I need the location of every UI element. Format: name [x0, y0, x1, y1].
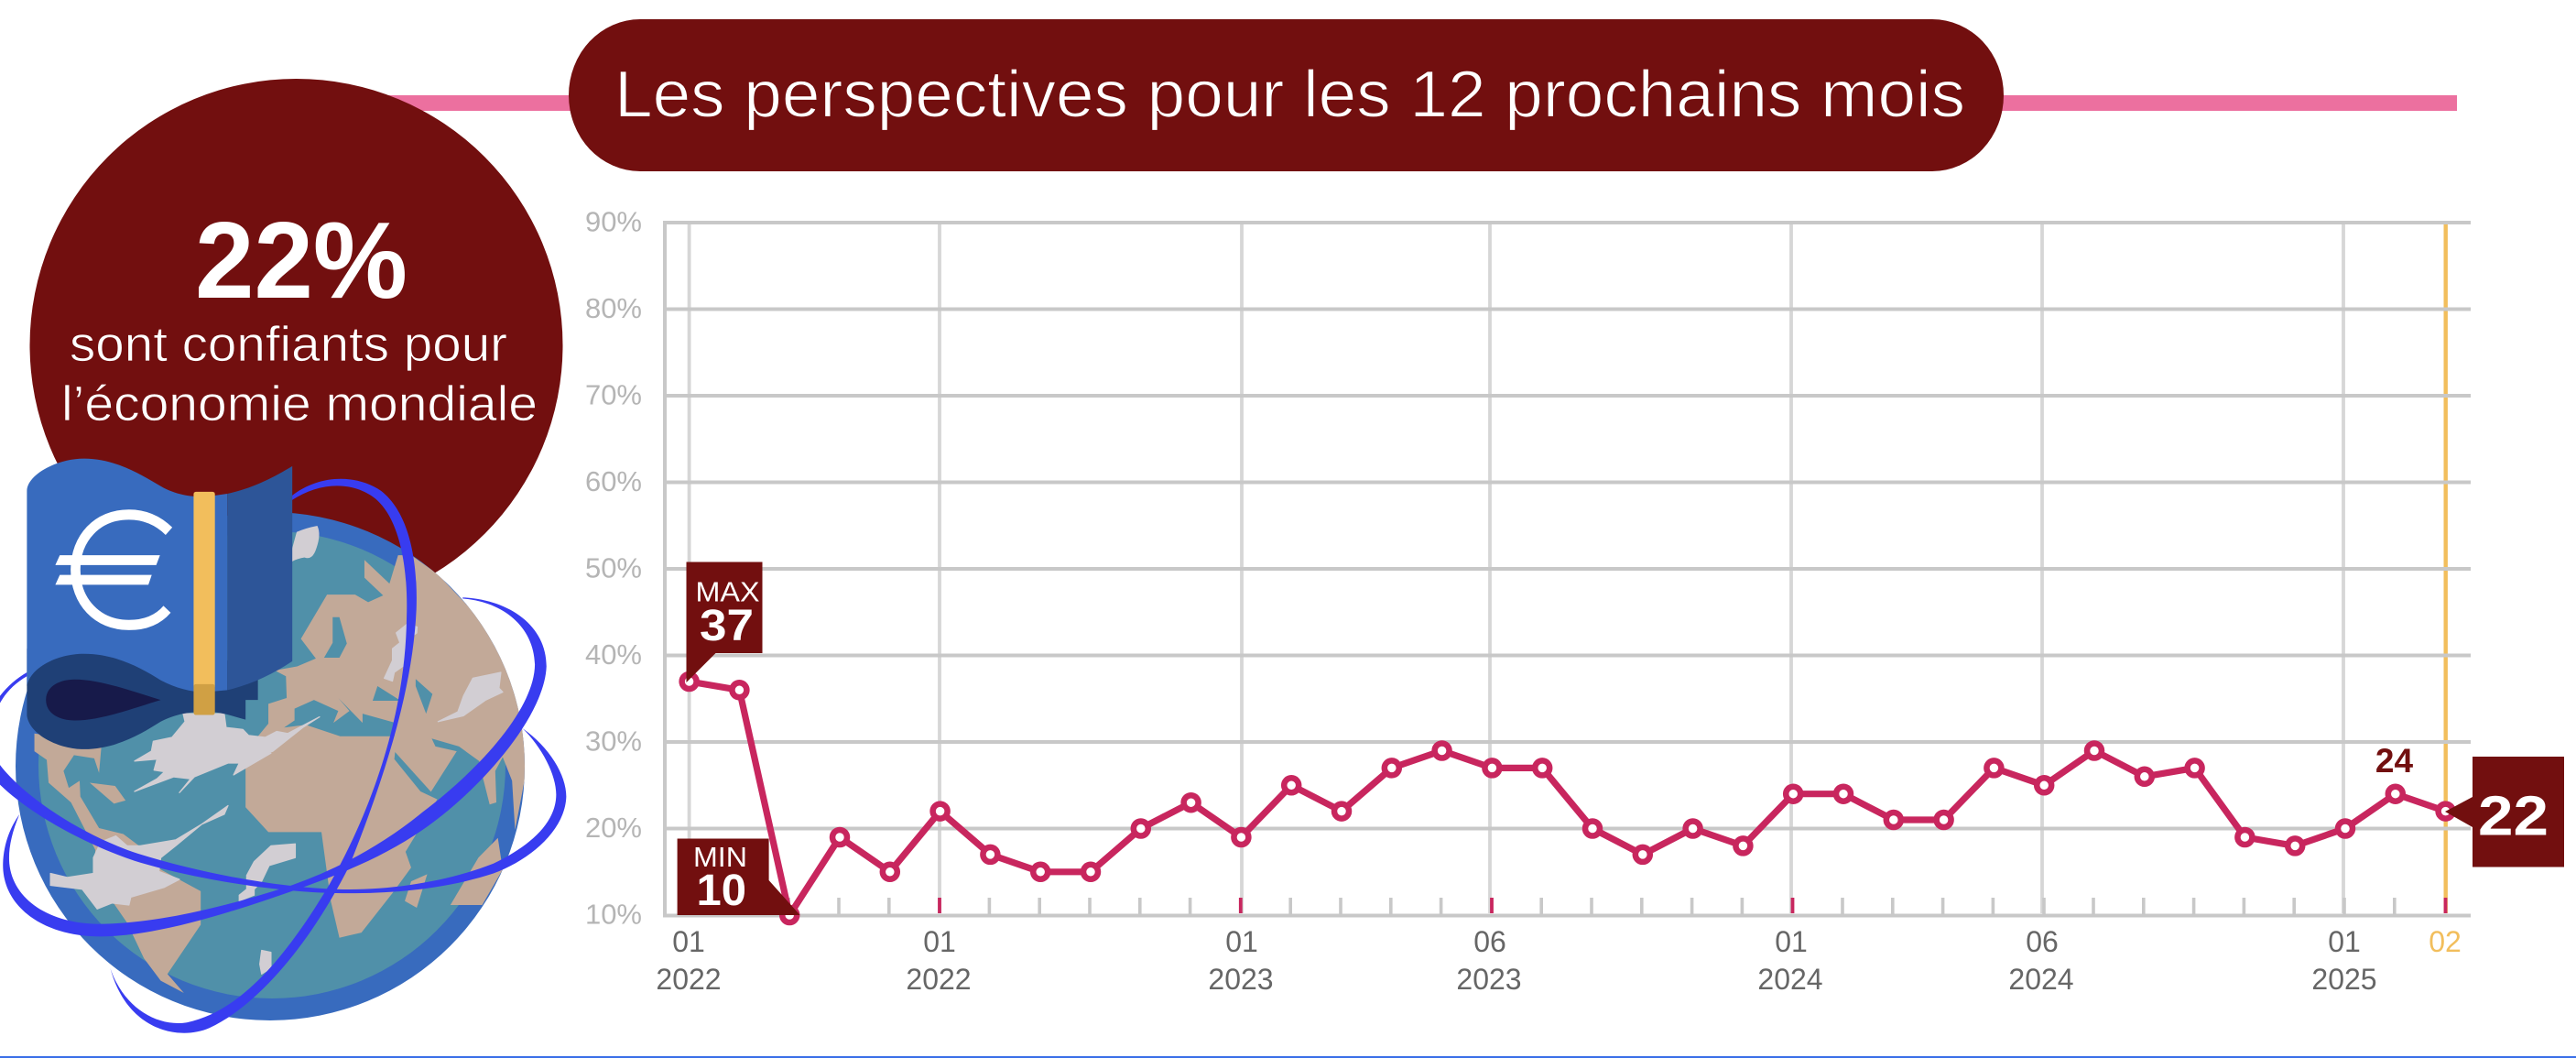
x axis month labels: 06 — [1473, 925, 1506, 958]
callout: latest value — [2445, 757, 2564, 867]
line chart — [585, 205, 2564, 996]
orbit rings — [0, 479, 566, 1033]
x axis month labels: 01 — [1775, 925, 1808, 958]
x axis month labels: 01 — [1225, 925, 1258, 958]
highlighted ticks — [940, 898, 2445, 913]
callout: minimum: MIN — [693, 841, 747, 873]
current month marker line — [2443, 223, 2448, 913]
euro symbol — [55, 515, 168, 625]
vertical grid lines — [690, 223, 2343, 913]
big number 22%: 22% — [195, 200, 408, 322]
flag — [27, 459, 292, 749]
x axis year labels: 2022 — [906, 963, 972, 996]
callout: maximum: 37 — [700, 602, 754, 650]
inland seas — [284, 617, 432, 736]
callout: maximum — [687, 562, 762, 682]
ribbon fold — [46, 680, 161, 721]
icon: globe with euro flag — [0, 459, 566, 1033]
x axis year labels — [656, 963, 2377, 996]
callout: latest value: 22 — [2478, 784, 2549, 846]
callout: minimum: 10 — [696, 867, 746, 915]
x axis month labels: 01 — [2328, 925, 2361, 958]
x axis month labels: 01 — [923, 925, 956, 958]
callout: maximum: MAX — [696, 575, 760, 608]
x axis year labels: 2024 — [2008, 963, 2074, 996]
x axis year labels: 2022 — [656, 963, 722, 996]
callout: minimum — [678, 839, 800, 915]
x axis year labels: 2025 — [2311, 963, 2377, 996]
flag ribbon shadow — [27, 649, 258, 749]
y axis labels: 40% — [585, 638, 642, 671]
pink header rule — [366, 95, 2457, 111]
data line — [690, 682, 2446, 915]
caption line 1: sont confiants pour — [70, 317, 507, 372]
data point markers — [682, 674, 2453, 922]
y axis labels: 50% — [585, 551, 642, 584]
x axis year labels: 2023 — [1456, 963, 1522, 996]
x axis month labels — [672, 925, 2462, 958]
y axis labels: 70% — [585, 379, 642, 410]
title pill — [569, 19, 2004, 171]
flag pole base — [193, 684, 215, 714]
x axis year labels: 2024 — [1757, 963, 1823, 996]
caption line 2: l’économie mondiale — [61, 376, 538, 431]
globe ocean rim — [16, 512, 525, 1020]
horizontal grid lines — [663, 221, 2471, 917]
confidence circle callout — [29, 79, 562, 612]
x axis month labels: 06 — [2026, 925, 2059, 958]
y axis labels: 20% — [585, 812, 642, 844]
axis ticks — [738, 898, 2395, 914]
y axis labels: 80% — [585, 292, 642, 324]
x axis year labels: 2023 — [1208, 963, 1274, 996]
y axis labels: 90% — [585, 205, 642, 238]
value label 24: 24 — [2375, 742, 2413, 780]
continents — [35, 555, 527, 993]
flag cloth — [27, 459, 227, 693]
clouds — [50, 527, 503, 974]
x axis month labels: 01 — [672, 925, 705, 958]
title text: Les perspectives pour les 12 prochains mois — [614, 59, 1965, 132]
y axis labels — [585, 205, 642, 931]
globe sea — [38, 531, 505, 998]
flag pole — [193, 492, 215, 689]
y axis labels: 30% — [585, 725, 642, 757]
flag right panel — [227, 466, 292, 690]
last month label: 02 — [2429, 925, 2462, 958]
bottom border line — [0, 1056, 2576, 1058]
y axis labels: 60% — [585, 465, 642, 497]
continents and clouds — [35, 527, 527, 993]
y axis labels: 10% — [585, 898, 642, 931]
